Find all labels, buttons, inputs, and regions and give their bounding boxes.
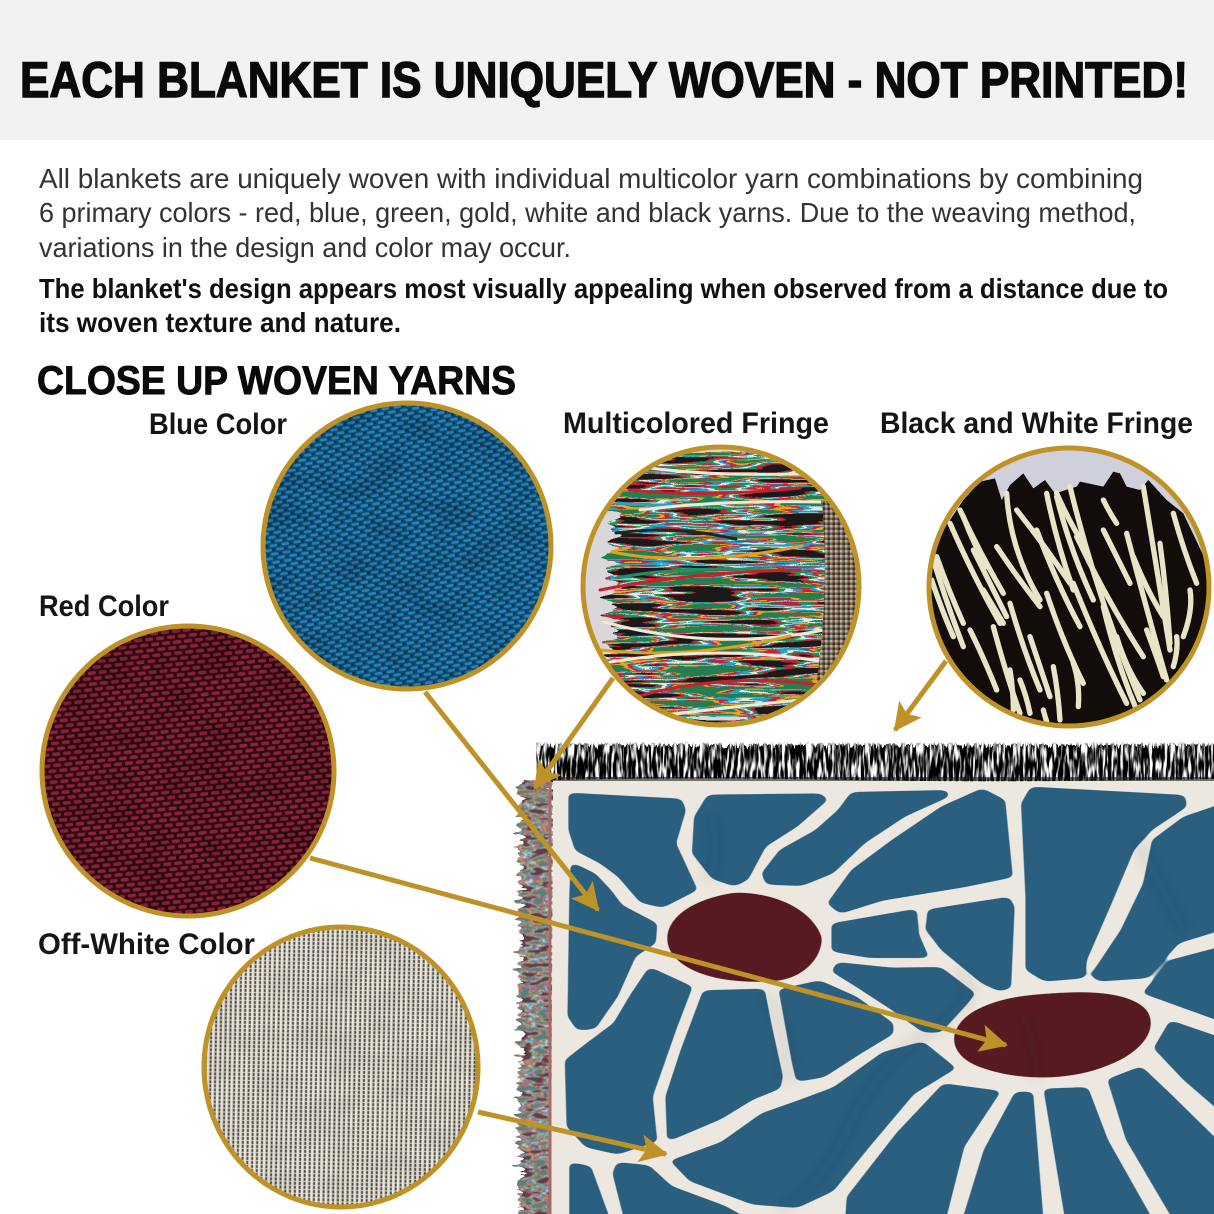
arrow: off-white color to blanket <box>478 1112 666 1154</box>
intro paragraph: variations in the design and color may occur. <box>39 232 571 263</box>
title banner <box>0 0 1214 140</box>
label: blue color: Blue Color <box>149 408 287 441</box>
swatch: blue color <box>255 395 560 700</box>
blanket pattern <box>565 787 1214 1214</box>
swatch: multicolored fringe <box>578 442 868 732</box>
swatch: red color <box>35 618 341 924</box>
bold note: its woven texture and nature. <box>39 307 401 338</box>
label: off-white color: Off-White Color <box>38 928 255 961</box>
label: black and white fringe: Black and White Fringe <box>880 407 1193 440</box>
intro paragraph <box>39 163 1143 263</box>
red ovals <box>667 893 1151 1078</box>
label: multicolored fringe: Multicolored Fringe <box>563 407 829 440</box>
section heading: CLOSE UP WOVEN YARNS <box>37 359 516 403</box>
arrow: red color to blanket <box>310 858 1006 1045</box>
intro paragraph: All blankets are uniquely woven with individual multicolor yarn combinations by combining <box>39 163 1143 194</box>
blue shapes <box>565 787 1214 1214</box>
left multicolor fringe <box>519 780 553 1214</box>
intro paragraph: 6 primary colors - red, blue, green, gold, white and black yarns. Due to the weaving method, <box>39 197 1136 228</box>
swatch: black and white fringe <box>920 442 1214 737</box>
arrow: blue color to blanket <box>425 692 598 910</box>
blanket <box>519 744 1214 1214</box>
bold note <box>39 273 1168 338</box>
arrow: black and white fringe to blanket <box>895 661 946 730</box>
arrow: multicolored fringe to blanket <box>535 678 613 788</box>
fabric folds <box>708 817 1184 1210</box>
top black and white fringe <box>536 744 1214 782</box>
swatch: off-white color <box>198 920 486 1214</box>
blanket body <box>551 778 1214 1214</box>
label: red color: Red Color <box>39 590 169 623</box>
woven edge <box>816 500 856 684</box>
